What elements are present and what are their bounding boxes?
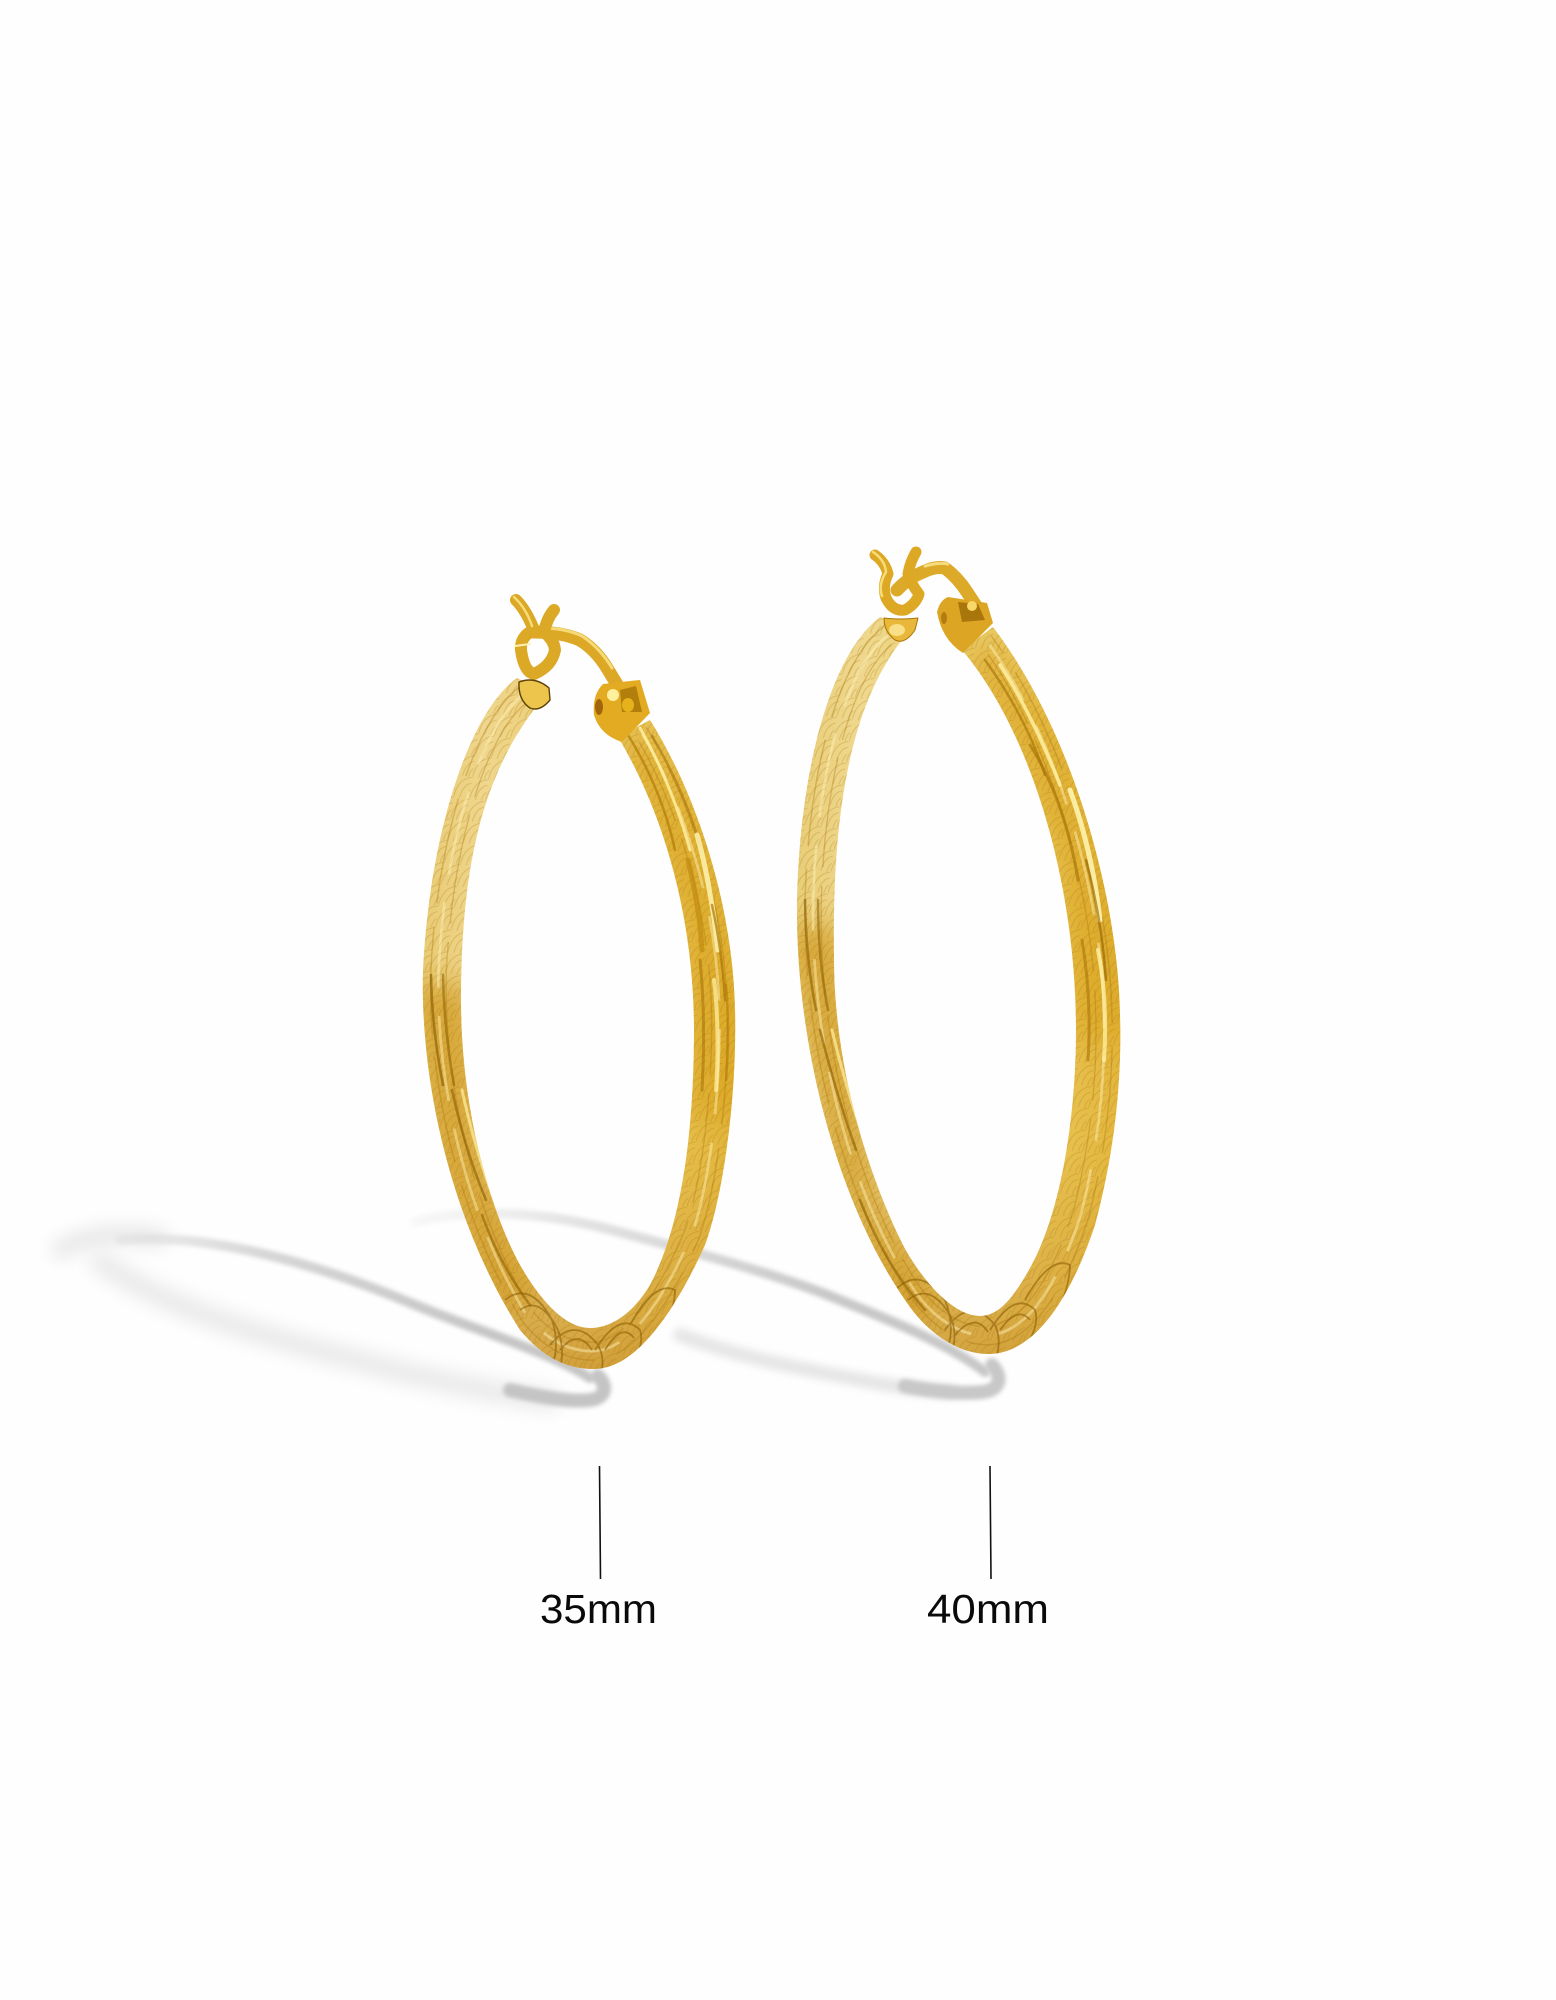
V prong catch bbox=[516, 600, 555, 674]
hinge wire bbox=[897, 568, 984, 618]
hinge clasp: 35mm bbox=[514, 597, 650, 742]
hinge clasp: 40mm bbox=[873, 552, 993, 653]
product photo infographic bbox=[54, 546, 1120, 1624]
bright right limb tone bbox=[618, 720, 745, 1120]
hoop earring: 40mm bbox=[785, 552, 1130, 1370]
lower-left darker limb tone bbox=[785, 925, 940, 1330]
scallop engraving texture bbox=[422, 678, 736, 1369]
hinge block bbox=[937, 597, 993, 653]
lower-left darker limb tone bbox=[410, 985, 540, 1320]
shadow: 40mm hoop bbox=[415, 1213, 999, 1393]
cup end bbox=[884, 618, 918, 641]
hinge block bbox=[594, 680, 650, 742]
fine engraved grooves bbox=[431, 686, 727, 1360]
scallop fan at bottom of hoop bbox=[895, 1263, 1070, 1358]
V prong catch bbox=[875, 552, 919, 610]
hoop band: 35mm bbox=[422, 678, 736, 1369]
size marker line: 40mm bbox=[990, 1466, 991, 1579]
fine engraved grooves bbox=[805, 626, 1112, 1345]
hinge wire bbox=[533, 632, 624, 696]
scallop fan at bottom of hoop bbox=[505, 1288, 675, 1376]
scallop engraving texture bbox=[790, 610, 1130, 1370]
shadow: 35mm hoop bbox=[60, 1235, 604, 1401]
high-contrast grooves on right limb bbox=[431, 728, 728, 1305]
cup end bbox=[519, 680, 550, 709]
hoop band: 40mm bbox=[785, 610, 1130, 1370]
bright right limb tone bbox=[960, 640, 1130, 1040]
size marker line: 35mm bbox=[600, 1466, 601, 1579]
hoop earring: 35mm bbox=[410, 597, 750, 1380]
high-contrast grooves on right limb bbox=[805, 660, 1106, 1310]
size label: 35mm: 35mm bbox=[540, 1586, 657, 1632]
size label: 40mm: 40mm bbox=[927, 1586, 1049, 1632]
